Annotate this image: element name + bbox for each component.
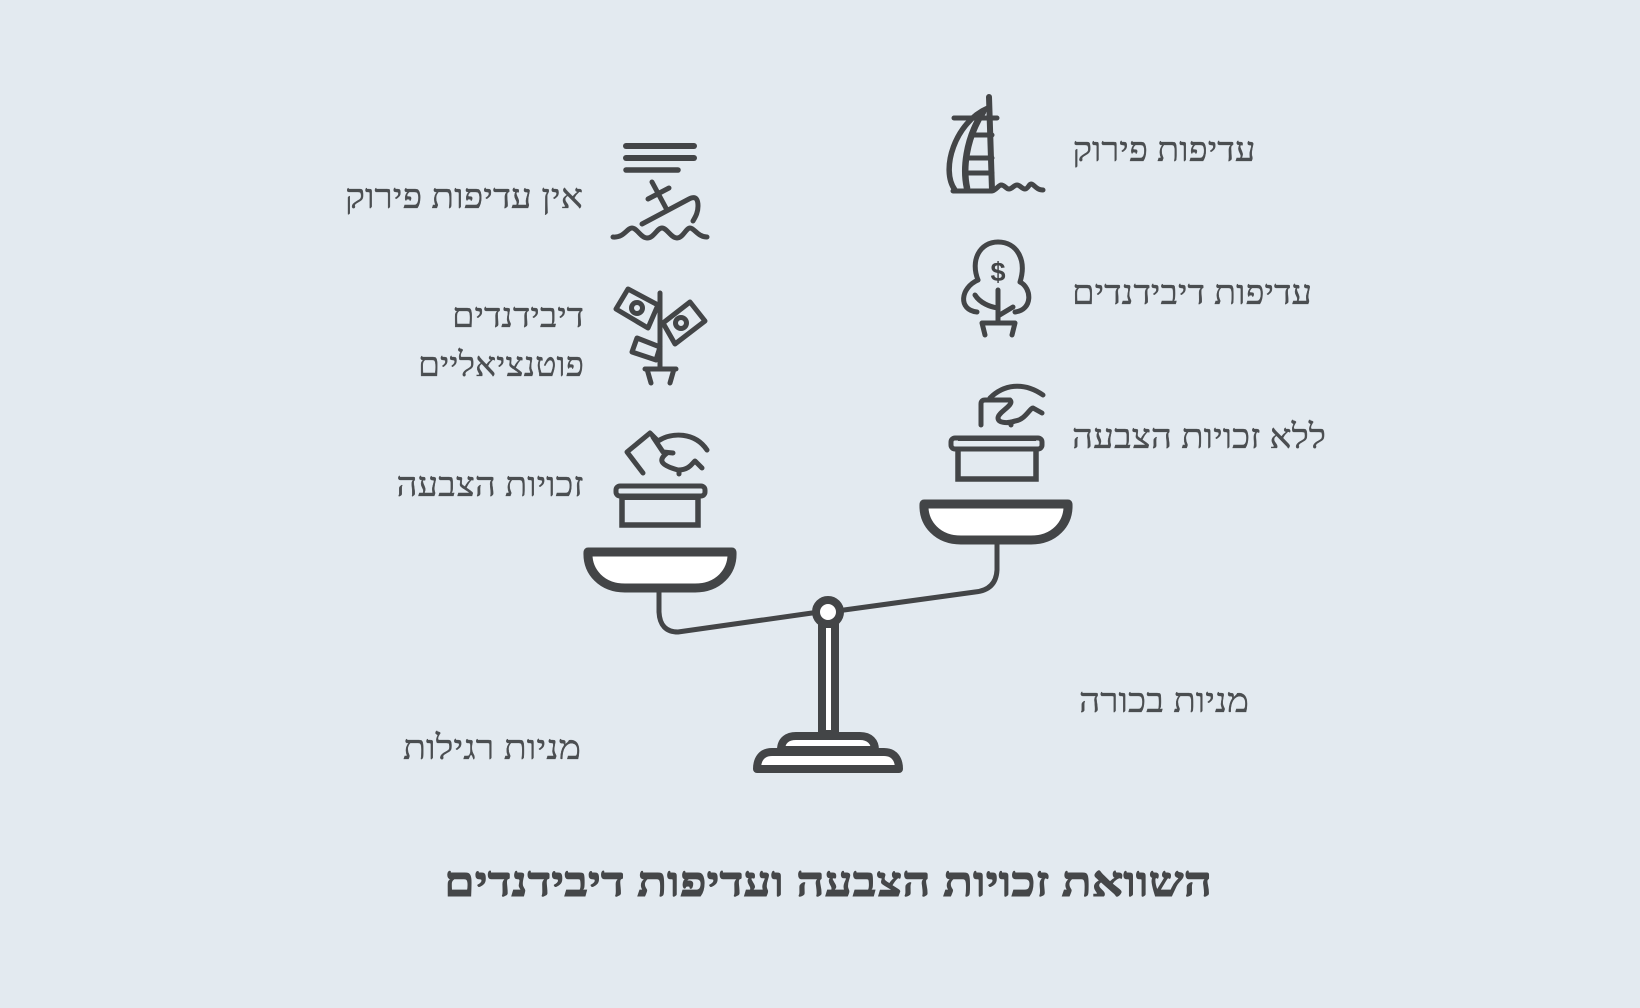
label: voting rights: זכויות הצבעה [396, 467, 584, 504]
label: potential dividends: דיבידנדים [452, 298, 584, 335]
label: liquidation preference: עדיפות פירוק [1072, 132, 1256, 169]
icon: dollar tree [964, 242, 1029, 335]
label: common shares: מניות רגילות [403, 730, 581, 767]
dollar sign: $ [990, 257, 1006, 287]
icon: ballot box left with hand [616, 433, 707, 525]
scale upper base [781, 736, 875, 750]
balance scale [588, 504, 1068, 769]
label: dividend preference: עדיפות דיבידנדים [1072, 275, 1312, 312]
label: preferred shares: מניות בכורה [1079, 683, 1249, 720]
label: no voting rights: ללא זכויות הצבעה [1072, 419, 1326, 456]
scale pivot [816, 600, 840, 624]
label: potential dividends: פוטנציאליים [418, 347, 584, 384]
icon: money plant [616, 289, 705, 383]
icon: sinking ship [613, 146, 707, 238]
left pan [588, 552, 732, 588]
label: no liquidation preference: אין עדיפות פירוק [345, 179, 583, 216]
icon: ballot box right with hand [951, 386, 1043, 479]
title: השוואת זכויות הצבעה ועדיפות דיבידנדים [444, 860, 1212, 906]
scale beam [659, 542, 997, 632]
scale lower base [757, 752, 899, 769]
icon: Burj Al Arab tower [949, 97, 1043, 191]
scale column [822, 624, 835, 734]
right pan [924, 504, 1068, 540]
label: potential dividends [418, 298, 584, 384]
